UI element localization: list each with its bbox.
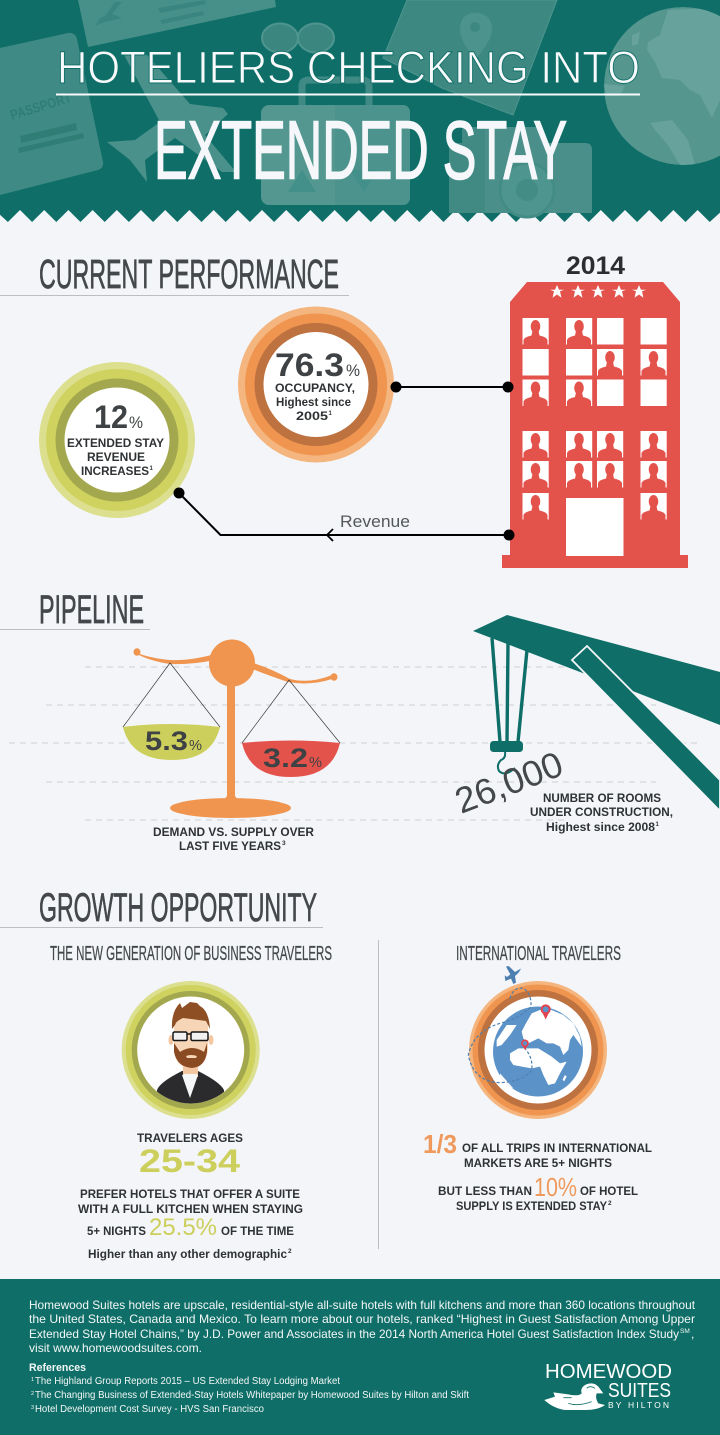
stat ring: revenue: 12	[94, 399, 128, 435]
kitchen preference text: OF THE TIME	[221, 1224, 294, 1238]
references: The Changing Business of Extended-Stay Hotels Whitepaper by Homewood Suites by Hilton and Skift	[35, 1390, 469, 1401]
about paragraph: visit www.homewoodsuites.com.	[29, 1341, 202, 1355]
stat ring: occupancy: %	[346, 361, 360, 380]
rooms caption: Highest since 2008	[546, 820, 655, 834]
international stats text: MARKETS ARE 5+ NIGHTS	[464, 1156, 612, 1170]
crane hook	[498, 752, 515, 773]
crane cables	[492, 638, 527, 742]
about paragraph: Extended Stay Hotel Chains,” by J.D. Power and Associates in the 2014 North America Hotel Guest Satisfaction Index Study	[29, 1327, 679, 1341]
kitchen preference text: 25.5%	[149, 1214, 217, 1241]
about paragraph: Homewood Suites hotels are upscale, residential-style all-suite hotels with full kitchens and more than 360 locations throughout	[29, 1298, 696, 1312]
rooms caption: NUMBER OF ROOMS	[543, 791, 661, 805]
heading: growth opportunity: GROWTH OPPORTUNITY	[39, 886, 317, 930]
scale caption	[153, 825, 314, 853]
icon: map	[383, 0, 557, 115]
stat ring: revenue: INCREASES	[81, 466, 149, 478]
heading: current performance: CURRENT PERFORMANCE	[39, 251, 339, 297]
destination pins	[522, 1005, 550, 1050]
rooms caption: 1	[656, 822, 660, 828]
balance scale	[123, 640, 340, 818]
references: 1	[31, 1377, 34, 1383]
about paragraph: the United States, Canada and Mexico. To learn more about our hotels, ranked “Highest in Guest Satisfaction Among Upper	[29, 1312, 695, 1326]
scale caption: 3	[282, 840, 286, 847]
rooms caption	[530, 791, 673, 834]
Homewood Suites logo: SUITES	[608, 1379, 671, 1402]
rating stars	[550, 285, 646, 298]
icon: boarding ticket	[78, 0, 276, 47]
hotel building	[502, 282, 688, 568]
header banner	[0, 0, 720, 222]
stat ring: occupancy: OCCUPANCY,	[275, 383, 355, 395]
crane hook block	[490, 741, 523, 752]
kitchen preference text: Higher than any other demographic	[88, 1247, 287, 1261]
panel: international travelers	[423, 943, 652, 1213]
icon: camera	[449, 127, 592, 217]
stat ring: revenue: 1	[150, 466, 154, 472]
kitchen preference text: 2	[288, 1248, 292, 1255]
left pan: demand: 5.3	[145, 726, 188, 756]
Homewood Suites logo	[544, 1360, 672, 1410]
international stats text: 1/3	[423, 1129, 457, 1159]
rooms caption: UNDER CONSTRUCTION,	[530, 805, 673, 819]
globe ring	[468, 966, 607, 1119]
traveler age text	[137, 1131, 243, 1179]
hotel door	[566, 498, 624, 556]
international stats text: 2	[608, 1200, 612, 1207]
about paragraph: SM	[680, 1328, 690, 1335]
Homewood Suites logo: BY HILTON	[608, 1400, 669, 1410]
crane boom	[473, 615, 720, 725]
scale arms	[137, 653, 215, 664]
stat ring: revenue	[39, 362, 195, 518]
stat ring: occupancy	[238, 306, 394, 462]
traveler age text: 25-34	[139, 1143, 240, 1179]
stat ring: occupancy: 1	[328, 411, 332, 417]
globe continents	[497, 1010, 582, 1088]
revenue label: Revenue	[340, 512, 410, 531]
rooms figure 26,000: 26,000	[449, 743, 568, 821]
references: The Highland Group Reports 2015 – US Extended Stay Lodging Market	[35, 1376, 340, 1387]
kitchen preference text: WITH A FULL KITCHEN WHEN STAYING	[78, 1202, 303, 1216]
year label 2014: 2014	[566, 252, 625, 280]
references: 2	[31, 1391, 34, 1397]
international stats text: OF HOTEL	[580, 1184, 638, 1198]
about paragraph: ,	[691, 1327, 694, 1341]
icon: passport	[0, 33, 103, 195]
left pan: demand: %	[189, 737, 202, 754]
stat ring: revenue: REVENUE	[87, 452, 145, 464]
traveler age text: TRAVELERS AGES	[137, 1131, 243, 1145]
right pan: supply: %	[309, 754, 322, 771]
icon: globe	[604, 7, 720, 165]
stat ring: occupancy: 2005	[296, 409, 328, 423]
international stats text: SUPPLY IS EXTENDED STAY	[456, 1199, 607, 1213]
Homewood Suites logo: HOMEWOOD	[545, 1360, 672, 1383]
kitchen preference text: 5+ NIGHTS	[87, 1224, 146, 1238]
banner background with zigzag edge	[0, 0, 720, 222]
occupancy connector	[390, 382, 514, 392]
stat ring: revenue: EXTENDED STAY	[67, 438, 164, 450]
references	[29, 1362, 469, 1415]
international stats text: OF ALL TRIPS IN INTERNATIONAL	[462, 1141, 652, 1155]
international stats text	[423, 1129, 652, 1213]
international stats text: 10%	[534, 1172, 577, 1202]
icon: passport: PASSPORT	[8, 89, 73, 123]
about paragraph	[29, 1298, 696, 1355]
revenue connector arrow	[174, 488, 514, 541]
footer band	[0, 1279, 720, 1435]
references: References	[29, 1362, 86, 1374]
scale stand	[224, 680, 238, 800]
references: 3	[31, 1405, 34, 1411]
portrait ring with traveler	[122, 981, 260, 1119]
hotel windows	[522, 318, 667, 520]
heading: pipeline: PIPELINE	[39, 588, 144, 632]
international stats text: BUT LESS THAN	[438, 1184, 532, 1198]
scale caption: DEMAND VS. SUPPLY OVER	[153, 825, 314, 839]
right pan: supply: 3.2	[263, 743, 308, 773]
left pan: demand	[123, 663, 220, 760]
stat ring: occupancy: Highest since	[276, 395, 351, 409]
references: Hotel Development Cost Survey - HVS San Francisco	[35, 1404, 264, 1415]
title line one: HOTELIERS CHECKING INTO	[57, 42, 640, 93]
crane support arm	[572, 646, 720, 811]
kitchen preference text	[78, 1187, 303, 1261]
subheading: THE NEW GENERATION OF BUSINESS TRAVELERS	[50, 943, 332, 965]
stat ring: revenue: %	[129, 413, 143, 432]
stat ring: occupancy: 76.3	[275, 347, 344, 383]
panel: business travelers	[50, 943, 332, 1261]
icon: suitcase	[261, 80, 410, 205]
scale caption: LAST FIVE YEARS	[179, 839, 281, 853]
icon: sunglasses	[262, 24, 334, 52]
kitchen preference text: PREFER HOTELS THAT OFFER A SUITE	[80, 1187, 300, 1201]
crane	[473, 615, 720, 811]
flight path	[468, 988, 532, 1083]
title rule	[56, 94, 640, 96]
right pan: supply	[242, 680, 340, 777]
airplane icon	[505, 966, 521, 984]
icon: airplane	[107, 53, 236, 182]
duck mark	[544, 1383, 605, 1410]
